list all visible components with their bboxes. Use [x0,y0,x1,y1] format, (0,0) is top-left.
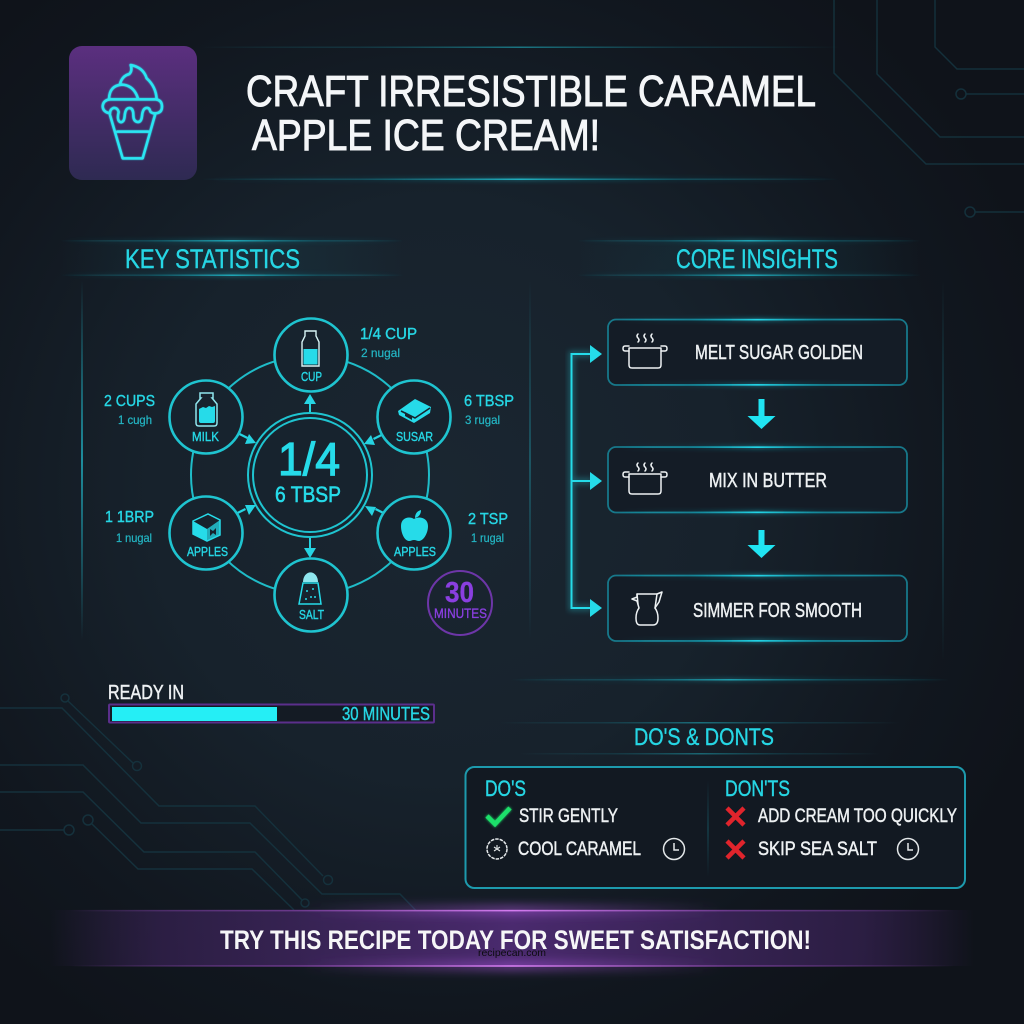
stat labels: 1 1BRP [105,509,154,526]
step 2 card [608,446,907,513]
icon: dashed timer [487,839,507,859]
time badge: 30 [445,577,474,609]
panel frame lines [81,280,950,680]
step 1 card [608,319,907,386]
header rule top [200,46,840,48]
footer banner: TRY THIS RECIPE TODAY FOR SWEET SATISFACTION! [220,925,811,955]
icon: pot [623,463,667,494]
spoke arrows [237,394,384,558]
time badge [428,571,492,635]
icon: pot [623,334,667,368]
arrow down 1 [748,399,776,429]
section band: core insights [577,240,921,276]
header: logo icon tile [69,46,197,180]
title: APPLE ICE CREAM! [252,111,600,160]
node: apple [378,496,450,570]
stat labels: 1/4 CUP [360,326,417,343]
section band: do's and don'ts: DO'S & DONTS [634,724,774,751]
stat labels: 2 CUPS [104,393,155,410]
node: sugar: SUSAR [396,430,433,444]
title [246,67,816,160]
watermark: recipecan.com [478,947,546,959]
panel: do's and don'ts [466,767,965,888]
step 2 card: MIX IN BUTTER [709,470,827,492]
section band: key statistics: KEY STATISTICS [125,244,300,274]
node: apple: APPLES [394,545,436,559]
icon: cross [727,841,744,858]
header rule bottom [200,178,840,180]
time badge: MINUTES [434,605,487,621]
section band: key statistics [60,240,404,276]
icon: cross [727,808,744,825]
outer ring [191,356,429,594]
title: CRAFT IRRESISTIBLE CARAMEL [246,67,816,116]
don'ts list: DON'TS [725,776,790,801]
icon: neon ice cream cone [103,65,162,158]
center hub: 1/4 [278,433,340,485]
arrow down 2 [748,530,776,558]
do's list: DO'S [485,776,526,801]
step 1 card: MELT SUGAR GOLDEN [695,342,863,364]
hub and spoke diagram [170,318,450,632]
icon: jug [632,592,662,625]
don'ts list [725,776,957,860]
stat labels: 6 TBSP [464,393,514,410]
don'ts list: SKIP SEA SALT [758,839,877,860]
ready in label: READY IN [108,682,184,704]
section band: core insights: CORE INSIGHTS [676,244,838,274]
do's list: STIR GENTLY [519,806,618,827]
don'ts list: ADD CREAM TOO QUICKLY [758,806,957,827]
node: cup [274,318,348,392]
stat labels: 3 rugal [465,413,500,427]
do's list [485,776,684,860]
node: apples box: APPLES [187,545,228,559]
stat labels [104,326,514,545]
step 3 card [608,575,907,642]
stat labels: 1 nugal [116,531,152,545]
step 3 card: SIMMER FOR SMOOTH [693,600,862,622]
stat labels: 2 TSP [468,511,508,528]
center hub [248,413,372,537]
stat labels: 2 nugal [361,346,400,360]
circuit traces top right [834,0,1024,217]
node: salt: SALT [299,608,324,622]
icon: clock [664,838,684,860]
node: milk: MILK [192,430,220,444]
do's list: COOL CARAMEL [518,839,641,860]
flow connector with arrows [572,345,602,617]
node: milk [170,380,242,454]
footer banner [50,906,974,970]
node: salt [274,558,348,632]
progress bar [109,704,434,724]
circuit traces bottom left [0,694,430,925]
progress bar: 30 MINUTES [342,704,430,724]
icon: check [487,808,510,824]
center hub: 6 TBSP [275,482,341,507]
node: sugar [378,380,450,454]
stat labels: 1 rugal [471,531,504,545]
node: apples box [170,496,242,570]
node: cup: CUP [301,370,322,384]
stat labels: 1 cugh [118,413,152,427]
icon: clock [898,838,918,860]
